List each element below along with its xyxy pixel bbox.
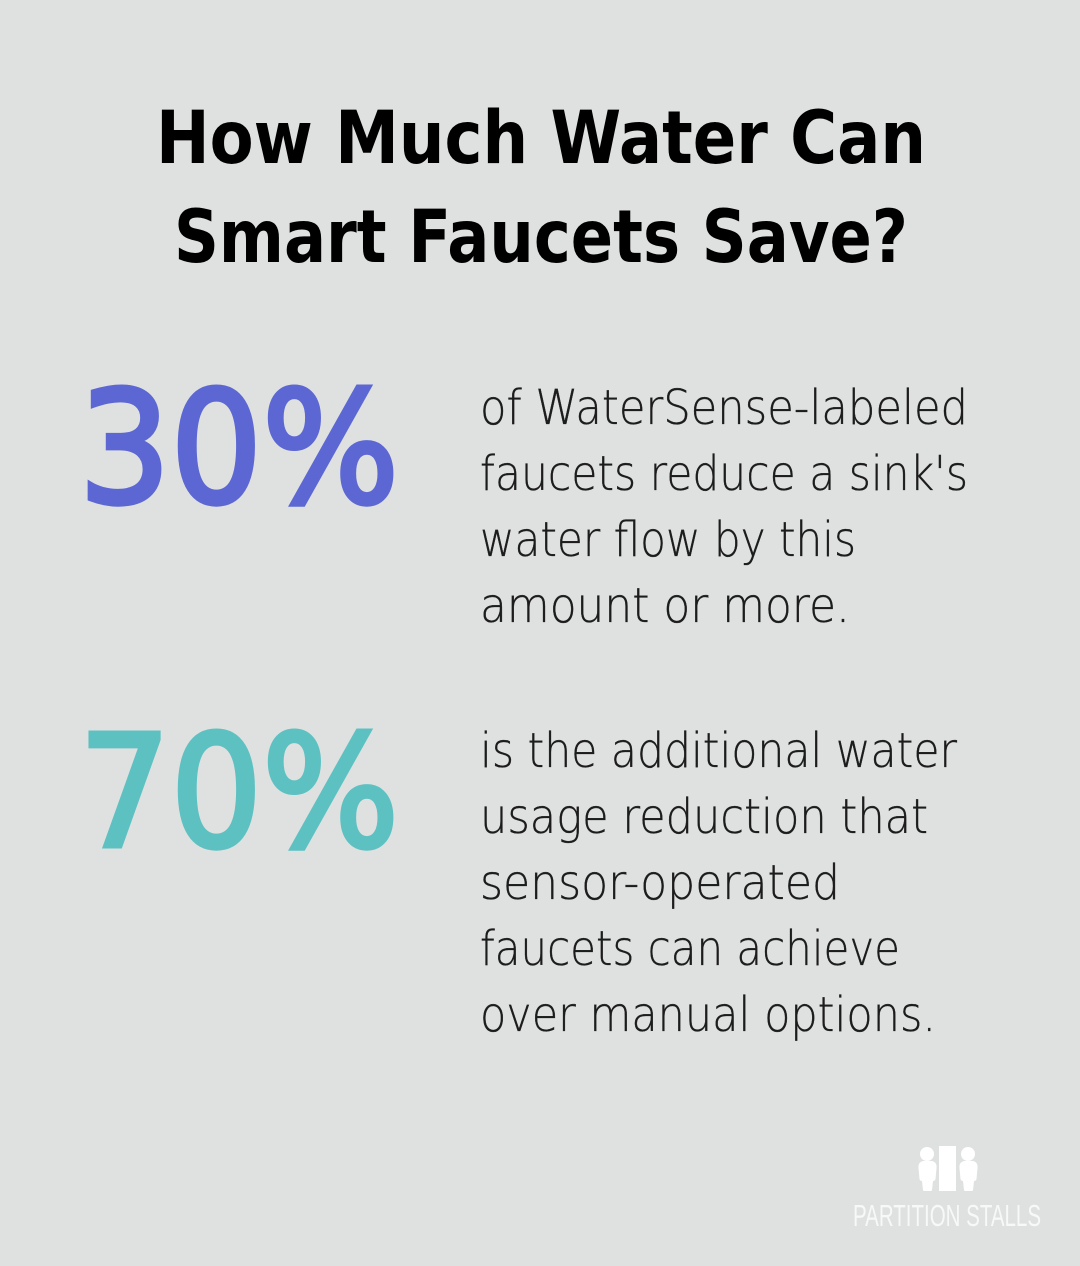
text block: 30% description bbox=[480, 380, 968, 634]
text block: 70% description bbox=[480, 723, 957, 1043]
text block: 70% description: usage reduction that bbox=[480, 789, 928, 845]
title bbox=[156, 96, 926, 280]
text block: 70% description: sensor-operated bbox=[480, 855, 840, 911]
text block: 30% description: water flow by this bbox=[480, 512, 856, 568]
stat: 70%: 70% bbox=[79, 702, 399, 883]
text block: 70% description: is the additional water bbox=[480, 723, 957, 779]
text block: 30% description: of WaterSense-labeled bbox=[480, 380, 968, 436]
icon: partition bbox=[939, 1146, 956, 1191]
stat: 30%: 30% bbox=[79, 358, 399, 539]
icon: right person bbox=[959, 1147, 978, 1191]
icon: left person bbox=[918, 1147, 937, 1191]
text block: 70% description: over manual options. bbox=[480, 987, 936, 1043]
text block: 30% description: faucets reduce a sink's bbox=[480, 446, 968, 502]
text block: 30% description: amount or more. bbox=[480, 578, 850, 634]
title: How Much Water Can bbox=[156, 96, 926, 181]
text block: 70% description: faucets can achieve bbox=[480, 921, 900, 977]
title: Smart Faucets Save? bbox=[174, 195, 908, 280]
logo: Partition Stalls bbox=[853, 1146, 1041, 1233]
